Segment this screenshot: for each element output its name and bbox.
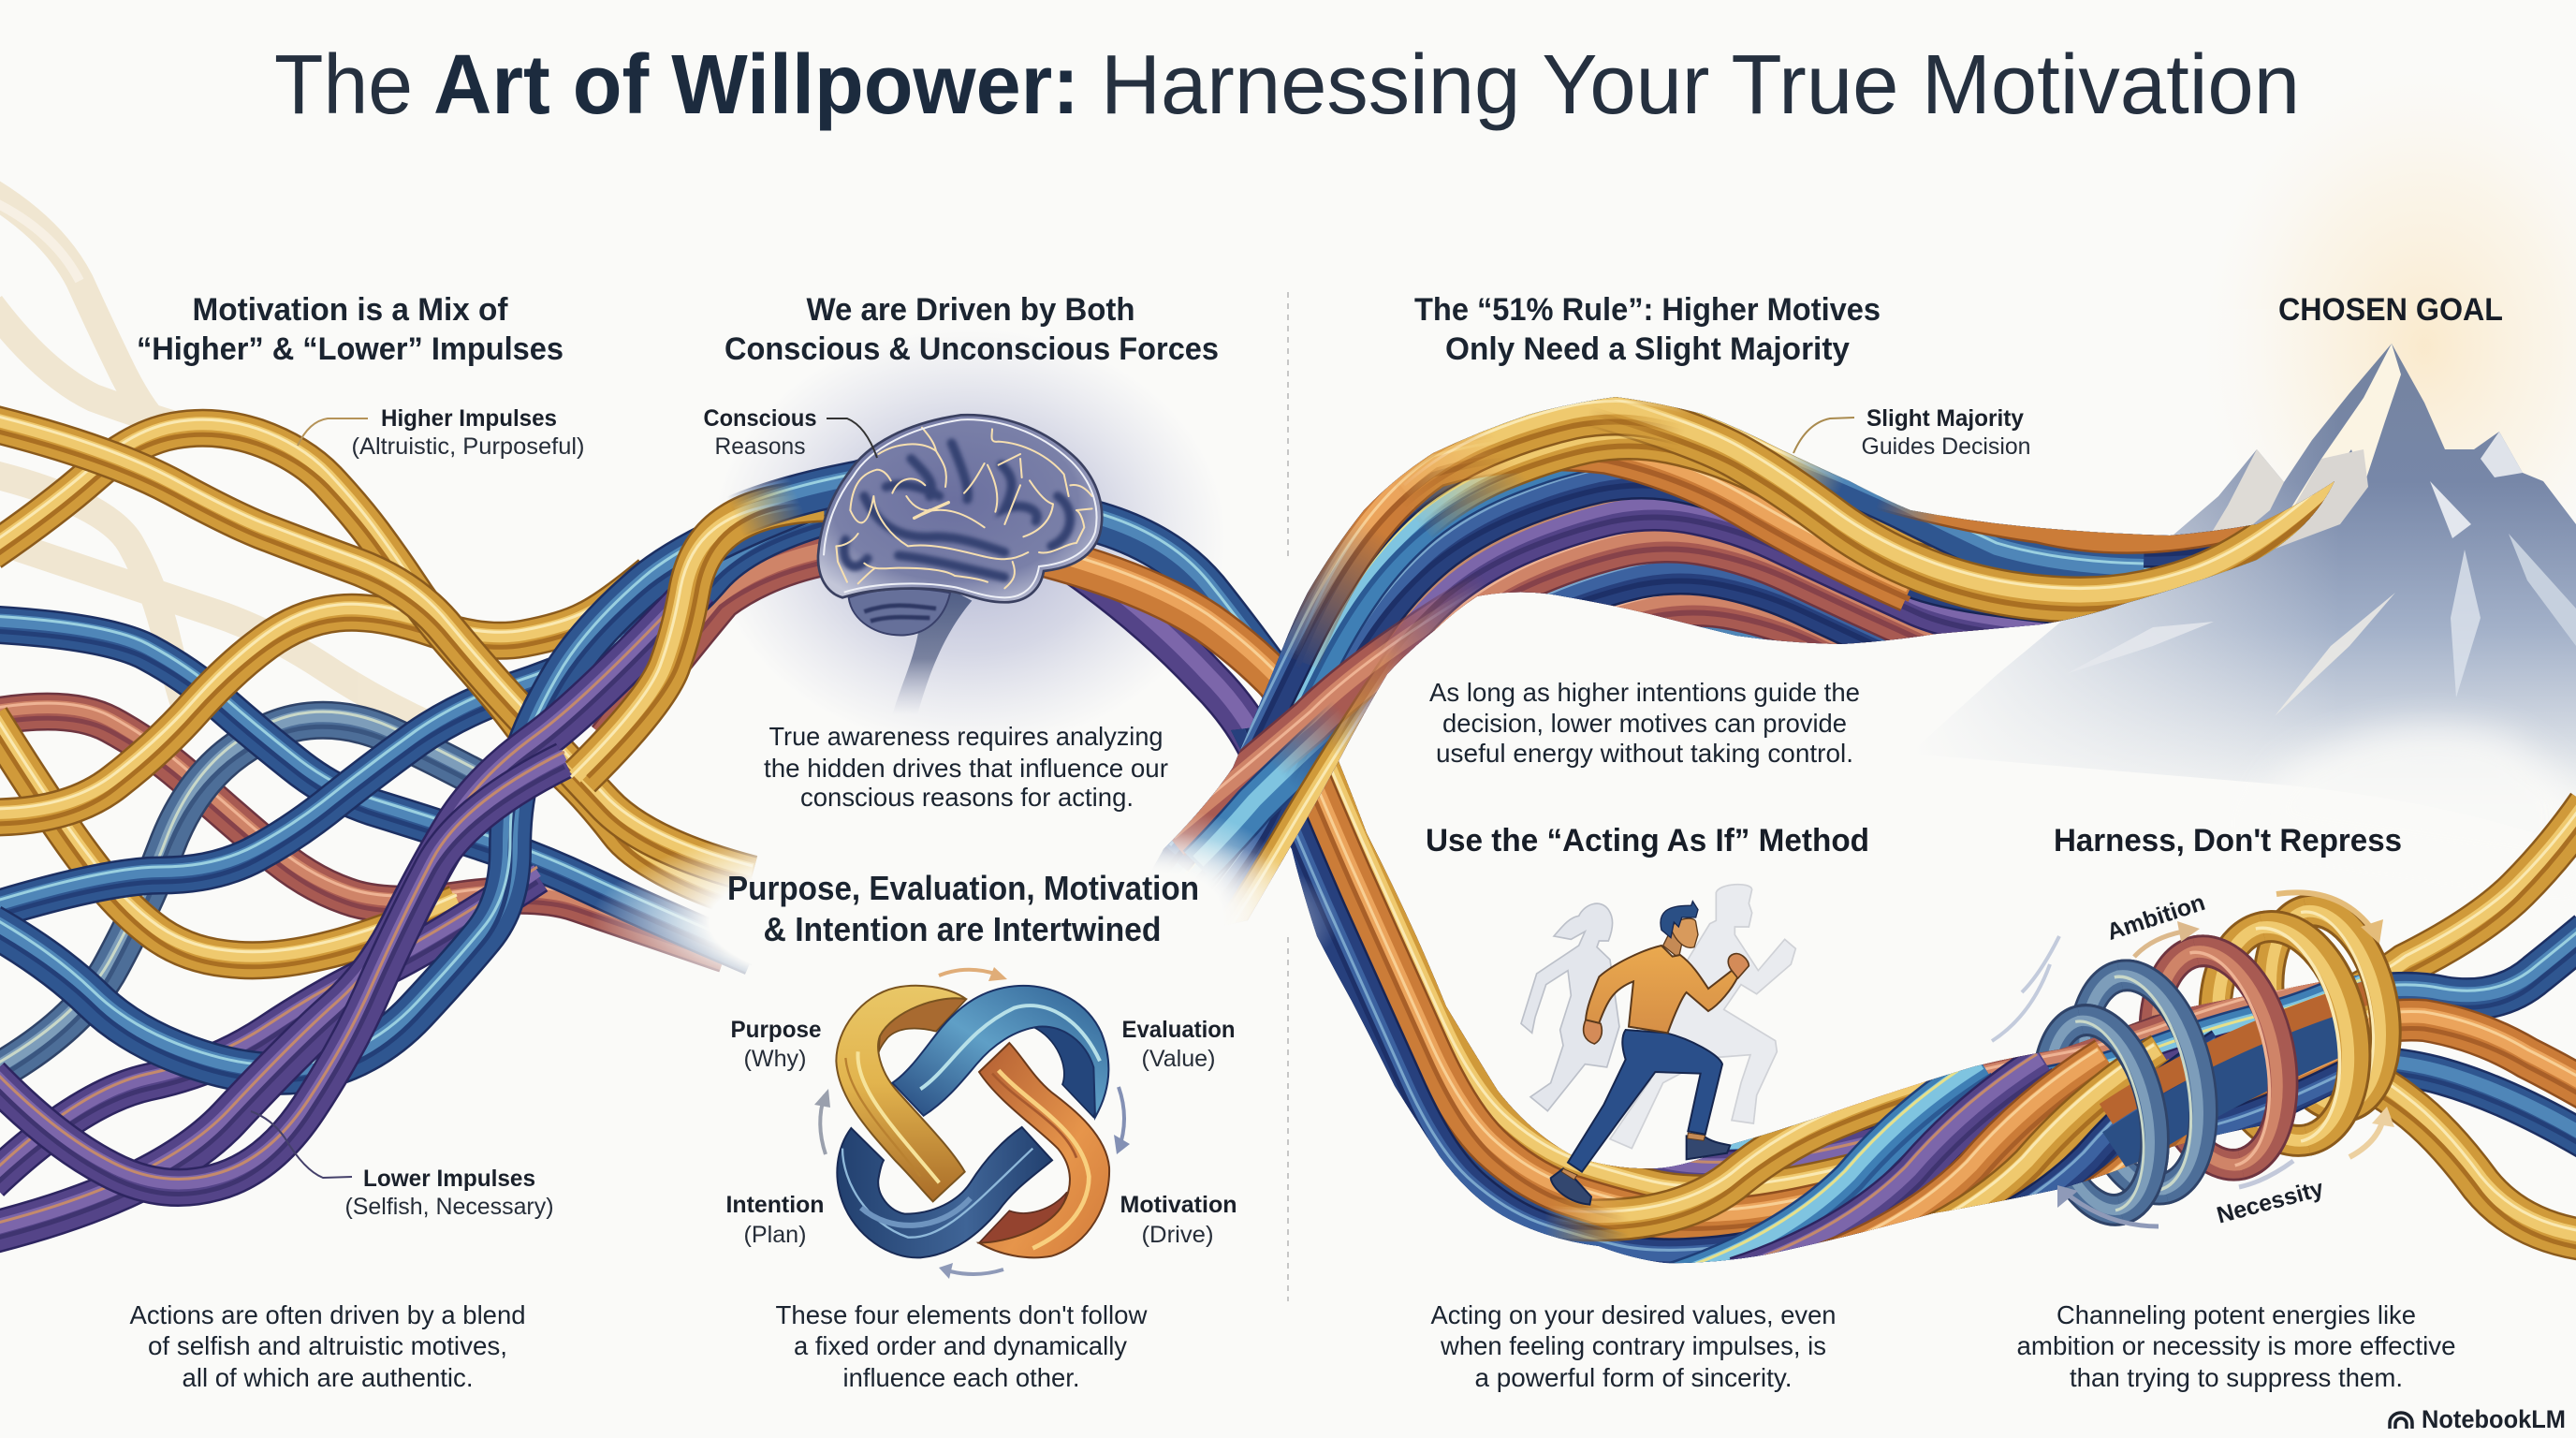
- strand: rust toward brain: [608, 543, 871, 747]
- label: conscious reasons: Conscious: [704, 405, 816, 432]
- label: purpose: (Why): [743, 1046, 807, 1072]
- label: intention: [726, 1192, 824, 1248]
- title: The: [274, 38, 413, 132]
- strand: gold majority: [1589, 391, 2334, 609]
- leader: conscious reasons: [827, 418, 877, 458]
- figure group: runner and ghost selves: [1521, 885, 1795, 1205]
- twist strand: gold orange: [1925, 1035, 2170, 1216]
- label: intention: (Plan): [743, 1222, 807, 1248]
- text block: acting on values: when feeling contrary impulses, is: [1440, 1331, 1826, 1360]
- decorative swoosh lines by rings: [1992, 936, 2059, 1041]
- heading: purpose evaluation: & Intention are Intertwined: [764, 910, 1161, 948]
- runner legs: [1568, 1030, 1722, 1172]
- icon: ghost figure woman: [1521, 903, 1619, 1111]
- fade mask behind purpose heading: [590, 812, 1339, 1033]
- knot strand: blue evaluation: [892, 986, 1108, 1117]
- heading: chosen goal: CHOSEN GOAL: [2278, 292, 2503, 328]
- label: evaluation: [1121, 1017, 1236, 1072]
- strand: blue over gold at brain: [735, 471, 871, 517]
- heading: harness dont repress: Harness, Don't Repress: [2054, 823, 2402, 858]
- label: conscious reasons: [704, 405, 816, 460]
- text block: channeling energies: [2016, 1300, 2456, 1392]
- text block: higher intentions: decision, lower motives can provide: [1442, 709, 1847, 738]
- strand: fan gold low: [2284, 1040, 2576, 1249]
- icon: notebooklm arcs: [2390, 1413, 2412, 1429]
- cerebrum glowing lines: [836, 428, 1092, 588]
- glow behind brain: [711, 328, 1226, 749]
- strand: pale blue tail: [1198, 712, 1348, 866]
- icon: four strand knot: [836, 986, 1109, 1257]
- heading: 51 percent rule: [1414, 292, 1881, 367]
- title: [274, 38, 2300, 132]
- strand: gold upper front: [0, 415, 753, 881]
- label: slight majority: Slight Majority: [1866, 405, 2024, 432]
- strand: rust: [0, 703, 725, 961]
- leader: slight majority: [1793, 418, 1854, 453]
- cerebrum outline: [818, 415, 1102, 602]
- strand: gold lower: [0, 709, 457, 967]
- title: Art of Willpower:: [433, 38, 1079, 132]
- knot strand: blue intention: [837, 1127, 1052, 1257]
- label: slight majority: Guides Decision: [1861, 433, 2031, 460]
- heading: 51 percent rule: Only Need a Slight Majority: [1445, 331, 1850, 367]
- heading: purpose evaluation: Purpose, Evaluation, Motivation: [727, 869, 1199, 907]
- strand: blue lower: [0, 469, 871, 1080]
- strand: blue crossing: [1778, 445, 2144, 573]
- strand: blue upper: [0, 616, 753, 963]
- text block: channeling energies: ambition or necessity is more effective: [2016, 1331, 2456, 1360]
- divider lower: [1287, 937, 1289, 1301]
- arrow: top clockwise: [2276, 892, 2383, 944]
- icon: mountain chosen goal: [1891, 309, 2576, 880]
- label: ambition: Ambition: [2103, 889, 2208, 946]
- label: purpose: Purpose: [730, 1017, 822, 1043]
- strand: gold twist to brain: [571, 501, 831, 777]
- runner front shoe: [1687, 1136, 1730, 1159]
- strands: right fan out: [2284, 797, 2576, 1249]
- label: evaluation: Evaluation: [1121, 1017, 1236, 1043]
- arrow: knot top: [939, 967, 1007, 981]
- rope: descending rope under the runner into the rings: [1231, 728, 2368, 1264]
- heading: acting as if: Use the “Acting As If” Method: [1426, 823, 1869, 858]
- text block: actions blend: of selfish and altruistic motives,: [148, 1331, 507, 1360]
- label: lower impulses: (Selfish, Necessary): [344, 1194, 554, 1220]
- strand: gold upper back: [0, 419, 753, 910]
- text block: actions blend: Actions are often driven by a blend: [129, 1300, 526, 1329]
- icon: glowing brain: [818, 415, 1102, 714]
- twist strand: rust: [2083, 1135, 2187, 1181]
- twist strand: gold ridge: [1544, 1064, 1975, 1227]
- label: conscious reasons: Reasons: [715, 433, 805, 460]
- text block: higher intentions: As long as higher intentions guide the: [1429, 678, 1860, 707]
- text block: four elements: [775, 1300, 1148, 1392]
- text block: four elements: a fixed order and dynamically: [794, 1331, 1127, 1360]
- rope: big 51 percent rope rising to the summit: [1156, 397, 2334, 921]
- runner fist: [1728, 954, 1749, 978]
- text block: channeling energies: than trying to suppress them.: [2070, 1363, 2403, 1392]
- rope: brain to crossing: [1048, 506, 1292, 758]
- runner back shoe: [1551, 1168, 1591, 1205]
- label: necessity: Necessity: [2214, 1175, 2326, 1229]
- strand: gold on hump: [1404, 401, 1983, 564]
- runner ankles: [1561, 1133, 1705, 1180]
- text block: four elements: These four elements don't follow: [775, 1300, 1148, 1329]
- text block: acting on values: Acting on your desired values, even: [1430, 1300, 1837, 1329]
- arrow: knot bottom: [939, 1263, 1003, 1279]
- text block: higher intentions: [1429, 678, 1860, 768]
- arrow: right side: [2349, 1107, 2394, 1157]
- text block: true awareness: True awareness requires analyzing: [769, 722, 1163, 751]
- text block: higher intentions: useful energy without taking control.: [1436, 739, 1853, 768]
- knot strand: orange motivation: [979, 1043, 1109, 1257]
- fade mask at rope tail: [1048, 810, 1301, 1016]
- label: purpose: [730, 1017, 822, 1072]
- strand: fan blue: [2284, 923, 2576, 1029]
- runner shirt: [1586, 946, 1738, 1033]
- heading: purpose evaluation: [727, 869, 1199, 948]
- text block: acting on values: a powerful form of sincerity.: [1475, 1363, 1792, 1392]
- runner left hand: [1584, 1020, 1602, 1044]
- strand: fan blue low: [2293, 1060, 2576, 1149]
- strand: purple under: [1058, 548, 1264, 758]
- twist strand: purple: [1730, 1052, 2052, 1260]
- strand: fan orange purple: [2284, 1011, 2576, 1099]
- panel: braided higher and lower impulses: [0, 415, 871, 1240]
- label: higher impulses: [352, 405, 584, 460]
- heading: conscious and unconscious: Conscious & Unconscious Forces: [724, 331, 1219, 367]
- cerebrum pale rim: [824, 419, 1097, 597]
- text block: actions blend: all of which are authentic.: [182, 1363, 474, 1392]
- heading: conscious and unconscious: We are Driven by Both: [807, 292, 1134, 328]
- strand: purple orange: [0, 867, 537, 1189]
- strand: blue middle: [0, 497, 871, 917]
- twist strand: orange: [1816, 1039, 2110, 1243]
- strand: orange around hump: [1296, 438, 1910, 669]
- label: motivation: [1120, 1192, 1237, 1248]
- arrow: necessity: [2057, 1161, 2293, 1226]
- knot strand: gold purpose: [836, 986, 966, 1201]
- strand: fan gold up: [2284, 797, 2576, 1038]
- rings: back halves: [2030, 900, 2403, 1220]
- cerebellum: [849, 589, 950, 635]
- brain stem: [892, 590, 972, 714]
- heading: motivation is a mix: Motivation is a Mix of: [193, 292, 508, 328]
- strand: gold middle: [0, 565, 651, 824]
- icon: ghost figure man: [1610, 885, 1795, 1149]
- text block: true awareness: conscious reasons for acting.: [800, 783, 1134, 812]
- strand: blue: [1067, 506, 1292, 702]
- arrow: ambition: [2134, 921, 2200, 957]
- logo: notebooklm mark: NotebookLM: [2422, 1405, 2566, 1433]
- twist strand: navy: [2004, 1030, 2217, 1200]
- heading: motivation is a mix: [137, 292, 564, 367]
- label: motivation: Motivation: [1120, 1192, 1237, 1218]
- divider upper: [1287, 292, 1289, 559]
- label: motivation: (Drive): [1142, 1222, 1213, 1248]
- heading: motivation is a mix: “Higher” & “Lower” Impulses: [137, 331, 564, 367]
- heading: 51 percent rule: The “51% Rule”: Higher Motives: [1414, 292, 1881, 328]
- text block: acting on values: [1430, 1300, 1837, 1392]
- text block: channeling energies: Channeling potent energies like: [2056, 1300, 2416, 1329]
- label: slight majority: [1861, 405, 2031, 460]
- faint background strands: [0, 192, 440, 730]
- strand: purple low: [0, 752, 564, 1194]
- text block: four elements: influence each other.: [842, 1363, 1080, 1392]
- strand: gold orange: [1048, 549, 1292, 697]
- runner neck: [1663, 930, 1682, 958]
- runner face: [1671, 918, 1698, 947]
- twist strand: blue: [1669, 1064, 1992, 1264]
- label: lower impulses: [344, 1166, 554, 1220]
- runner hair: [1661, 902, 1698, 938]
- strand: purple front: [0, 580, 698, 1240]
- leader: lower impulses: [251, 1111, 352, 1178]
- strand: steel blue: [0, 712, 510, 1082]
- label: higher impulses: (Altruistic, Purposeful): [352, 433, 584, 460]
- leader: higher impulses: [298, 418, 368, 446]
- label: intention: Intention: [726, 1192, 824, 1218]
- text block: true awareness: [764, 722, 1168, 812]
- warm glow behind peak: [2200, 66, 2576, 627]
- arrow: knot left: [814, 1089, 830, 1154]
- title: Harnessing Your True Motivation: [1101, 38, 2300, 132]
- label: higher impulses: Higher Impulses: [381, 405, 557, 432]
- text block: true awareness: the hidden drives that influence our: [764, 754, 1168, 783]
- heading: conscious and unconscious: [724, 292, 1219, 367]
- rings: front halves: [2075, 900, 2403, 1211]
- strand: rust diagonal on rising limb: [1170, 566, 1516, 838]
- strand: orange tail: [1881, 476, 2334, 531]
- text block: actions blend: [129, 1300, 526, 1392]
- arrow: knot right: [1114, 1087, 1130, 1154]
- label: evaluation: (Value): [1142, 1046, 1215, 1072]
- cerebrum dark folds: [844, 443, 1070, 578]
- inner strand through rings: [2115, 1020, 2368, 1152]
- strand: gold tail: [1235, 654, 1400, 921]
- label: lower impulses: Lower Impulses: [363, 1166, 535, 1192]
